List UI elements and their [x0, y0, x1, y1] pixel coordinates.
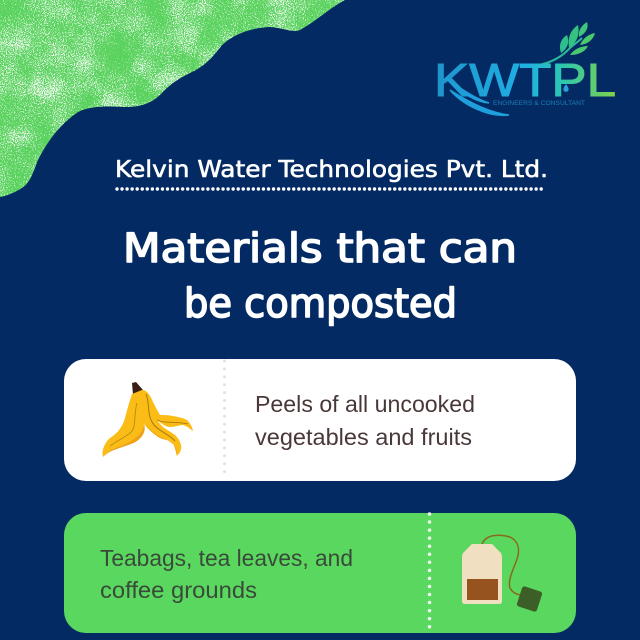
card text: Peels of all uncooked: [255, 391, 475, 417]
logo tagline: ENGINEERS & CONSULTANT: [493, 100, 585, 107]
company name: Kelvin Water Technologies Pvt. Ltd.: [115, 157, 548, 183]
card text: [100, 545, 353, 603]
title: Materials that can: [123, 226, 517, 272]
card text: Teabags, tea leaves, and: [100, 545, 353, 571]
logo water swoosh: [446, 78, 569, 115]
title: [123, 226, 517, 327]
icon: tea bag: [462, 535, 543, 612]
dotted divider: [117, 187, 546, 191]
card text: coffee grounds: [100, 577, 257, 603]
icon: banana peel: [102, 382, 193, 457]
logo letters: KWTPL: [434, 54, 616, 106]
card text: [255, 391, 475, 450]
panel: teabags card: [64, 513, 576, 633]
panel: peels card: [64, 359, 576, 481]
logo: KWTPL: [434, 22, 616, 115]
card text: vegetables and fruits: [255, 424, 472, 450]
title: be composted: [184, 281, 457, 327]
logo branch and leaves: [533, 22, 595, 66]
textured green corner: [0, 0, 350, 200]
